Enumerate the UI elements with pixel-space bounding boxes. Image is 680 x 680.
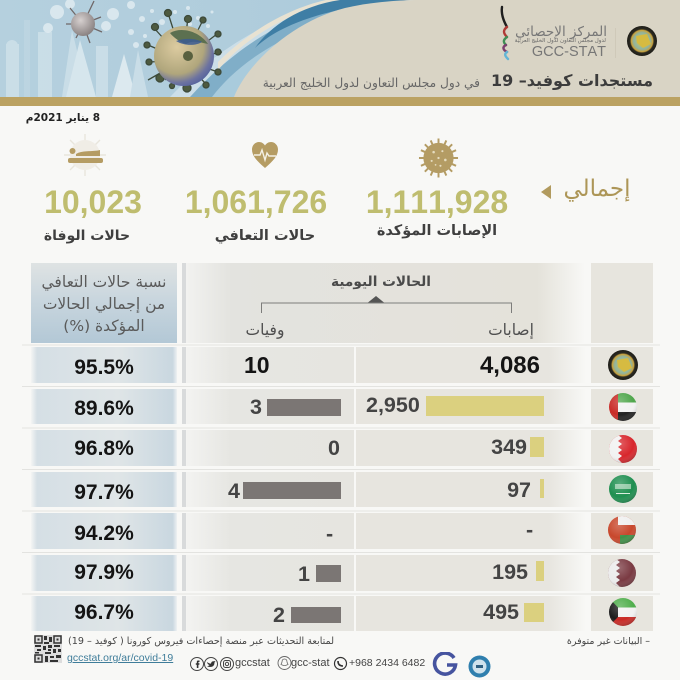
arrow: [541, 185, 551, 199]
row: Saudi Arabia: 97: [507, 478, 531, 502]
icon: heart: [252, 142, 278, 168]
row: UAE: [32, 389, 653, 424]
row: Kuwait: [32, 596, 653, 631]
swoosh bands: [170, 0, 680, 97]
footer link: gccstat.org/ar/covid-19: [67, 652, 173, 664]
table header: recovery ratio: [31, 263, 177, 343]
row: UAE: 3: [250, 395, 262, 419]
QR code: [34, 635, 62, 663]
certification logo: ISO: [432, 652, 458, 676]
earth with spikes: [144, 10, 222, 92]
GCC emblem: [627, 26, 657, 56]
table header: daily cases: [186, 263, 585, 343]
divider: [615, 28, 616, 58]
logo subtitle: لدول مجلس التعاون لدول الخليج العربية: [515, 38, 606, 44]
row: Oman: -: [526, 518, 533, 542]
row: Saudi Arabia: 4: [228, 479, 240, 503]
section label: total: إجمالي: [563, 176, 631, 202]
stat: confirmed number: 1,111,928: [366, 184, 508, 220]
stat: recovered number: 1,061,726: [185, 184, 327, 220]
row: Qatar: [32, 555, 653, 591]
recovery ratio heading: [42, 273, 166, 335]
beige header panel: [234, 0, 680, 97]
row: Kuwait: 96.7%: [74, 601, 134, 624]
daily cases heading: الحالات اليومية: [331, 274, 431, 290]
cases column heading: إصابات: [488, 321, 534, 339]
icon: patient in bed: [64, 134, 106, 176]
title: مستجدات كوفيد– 19: [491, 71, 653, 90]
stat: deaths number: 10,023: [44, 184, 142, 220]
sky background: [0, 0, 680, 97]
row: GCC: [32, 347, 653, 383]
bracket: [261, 296, 512, 313]
stat: confirmed label: الإصابات المؤكدة: [377, 223, 497, 239]
bokeh dots: [43, 0, 214, 48]
subtitle: في دول مجلس التعاون لدول الخليج العربية: [263, 76, 480, 90]
stat: deaths label: حالات الوفاة: [44, 228, 130, 244]
grey virus: [66, 1, 102, 43]
footer follow text: لمتابعة التحديثات عبر منصة إحصاءات فيروس كورونا ( كوفيد – 19): [68, 636, 334, 647]
table header separator: [182, 263, 186, 343]
row: Oman: [32, 513, 653, 549]
icon: snapchat: [278, 656, 292, 670]
row: Bahrain: 0: [328, 436, 340, 460]
logo GCC-STAT: GCC-STAT: [532, 44, 606, 60]
row: GCC: 10: [244, 352, 270, 378]
gold band: [0, 97, 680, 106]
row: Bahrain: [32, 430, 653, 466]
header banner: [0, 0, 680, 106]
recovery ratio heading: من إجمالي الحالات: [43, 295, 165, 313]
recovery ratio heading: المؤكدة (%): [63, 317, 145, 335]
row: Saudi Arabia: 97.7%: [74, 481, 134, 504]
row: Oman: 94.2%: [74, 522, 134, 545]
icon: virus: [419, 138, 458, 178]
skyline: [6, 20, 148, 97]
row: Oman: -: [326, 522, 333, 546]
icon: whatsapp: [334, 656, 348, 670]
row: GCC: 95.5%: [74, 356, 134, 379]
deaths column heading: وفيات: [246, 321, 284, 339]
row: Qatar: 195: [492, 560, 528, 584]
logo Arabic name: المركز الإحصائي: [515, 24, 607, 40]
social icons: [190, 657, 234, 671]
phone number: +968 2434 6482: [349, 657, 425, 669]
row: Kuwait: 2: [273, 603, 285, 627]
stat: recovered label: حالات التعافي: [215, 228, 315, 244]
date: 8 يناير 2021م: [26, 112, 100, 124]
table header: flag column: [591, 263, 653, 343]
row: UAE: 2,950: [366, 393, 420, 417]
certification logo: TUV: [468, 656, 490, 678]
row: Saudi Arabia: [32, 472, 653, 507]
row: Kuwait: 495: [483, 600, 519, 624]
row: Qatar: 97.9%: [74, 561, 134, 584]
row: Bahrain: 96.8%: [74, 437, 134, 460]
social handle: gcc-stat: gcc-stat: [291, 657, 330, 669]
row: GCC: 4,086: [480, 352, 540, 379]
row: UAE: 89.6%: [74, 397, 134, 420]
footnote: – البيانات غير متوفرة: [567, 636, 650, 647]
row: Qatar: 1: [298, 562, 310, 586]
social handle: gccstat: gccstat: [235, 657, 270, 669]
recovery ratio heading: نسبة حالات التعافي: [42, 273, 166, 291]
row: Bahrain: 349: [491, 435, 527, 459]
stat logo ribbons: [502, 7, 508, 59]
